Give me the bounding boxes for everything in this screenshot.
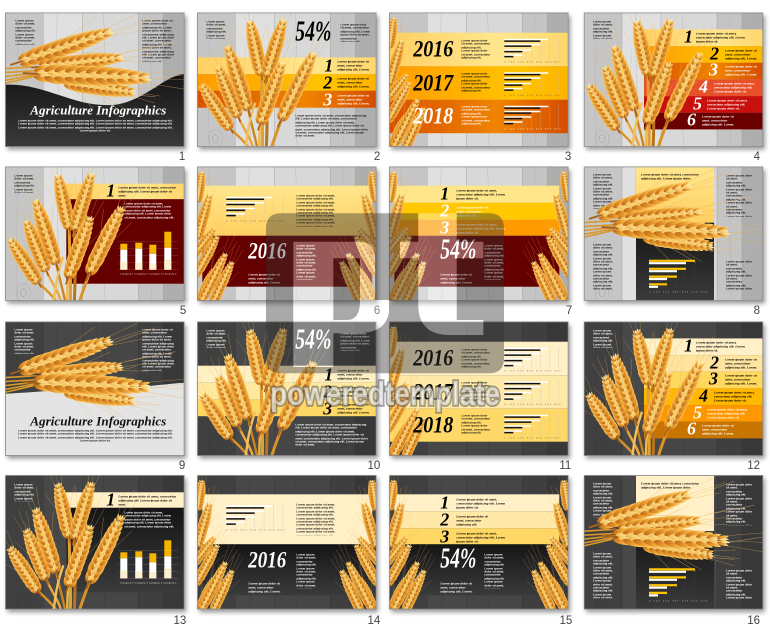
numbered list	[439, 492, 510, 546]
slide 6: yellow chart panel and maroon 2016 panel	[196, 166, 382, 314]
black panel	[636, 531, 714, 609]
icon: wheat left	[373, 467, 442, 625]
page number: 13	[174, 615, 186, 627]
numbered list: 1	[324, 56, 333, 76]
text: columns	[593, 482, 754, 600]
step bands	[644, 338, 764, 438]
slide 4: six step list	[583, 12, 768, 160]
slide 7: three bands and 54 percent on maroon	[373, 159, 584, 317]
year 2017 row	[412, 380, 561, 406]
black panel	[202, 544, 372, 595]
slide 5: column chart on maroon	[4, 166, 190, 314]
year 2016 row: 0 100 200 300 400 500 600	[504, 62, 561, 64]
year: 2016	[247, 239, 287, 264]
bands	[394, 186, 559, 287]
page number: 10	[368, 460, 380, 472]
column chart	[118, 232, 178, 276]
icon: wheat left	[181, 467, 250, 625]
title: Agriculture Infographics	[29, 103, 166, 118]
numbered steps: 3	[708, 60, 718, 80]
year: 2016	[247, 547, 287, 572]
year 2017 row: 2017	[412, 380, 455, 405]
numbered steps: 5	[693, 94, 702, 114]
heading number and text: 1	[106, 181, 115, 201]
slide 12: dark wood six step list	[565, 303, 765, 472]
numbered list: 3	[439, 218, 449, 238]
page number: 7	[566, 305, 572, 317]
slide 15: pale bands and 54 percent on black	[373, 467, 584, 627]
slide 2: 54 percent with three bands	[196, 12, 382, 160]
slide 14: cream chart panel and black 2016 panel	[181, 467, 392, 627]
numbered steps: 4	[698, 77, 708, 97]
bands	[394, 494, 559, 595]
year 2017 row: 2017	[412, 71, 455, 96]
numbered steps	[684, 336, 759, 439]
page number: 14	[368, 615, 381, 627]
page number: 2	[374, 151, 380, 163]
numbered steps: 5	[693, 403, 702, 423]
year 2017 row: 0 100 200 300 400 500 600	[504, 404, 561, 406]
numbered list	[322, 365, 370, 419]
numbered list: 1	[324, 365, 333, 385]
page number: 6	[374, 305, 380, 317]
bands 1 to 3	[197, 57, 377, 108]
numbered list: 3	[322, 399, 332, 419]
year 2016 row	[412, 37, 561, 64]
icon: wheat right	[516, 159, 584, 316]
slide 11: dark wood years with bar charts	[373, 314, 571, 472]
page number: 16	[747, 615, 760, 627]
column chart: Category 1 Category 2 Category 3 Category 4	[120, 273, 177, 276]
numbered steps	[684, 27, 759, 130]
page number: 12	[747, 460, 760, 472]
bar chart	[226, 504, 285, 531]
yellow header band	[65, 184, 185, 199]
slide 10: dark wood, 54 percent and pale bands	[178, 303, 380, 472]
step bands	[644, 29, 764, 129]
maroon panel	[202, 236, 372, 287]
bar chart	[226, 196, 285, 223]
text: columns	[593, 174, 754, 292]
numbered list	[323, 60, 370, 106]
icon: wheat bouquet	[0, 456, 148, 611]
year 2018 row	[412, 104, 561, 131]
numbered steps: 6	[687, 110, 696, 130]
cream panel	[202, 494, 372, 544]
year 2018 row: 0 100 200 300 400 500 600	[504, 129, 561, 131]
icon: wheat left	[373, 159, 442, 316]
heading number and text: 1	[106, 489, 115, 509]
year 2016 row: 0 100 200 300 400 500 600	[504, 371, 561, 373]
bar chart: 0 100 200 300 400 500 600	[226, 221, 285, 223]
yellow panel	[202, 186, 372, 236]
icon: wheat bunch	[582, 157, 770, 266]
year 2016 row: 2016	[412, 37, 454, 62]
numbered list: 1	[440, 492, 449, 512]
page number: 11	[559, 460, 571, 472]
heading number and text	[106, 489, 176, 509]
percentage: 54%	[295, 17, 331, 48]
numbered list	[439, 184, 510, 238]
yellow panel	[636, 167, 714, 223]
numbered steps: 2	[709, 44, 719, 64]
numbered steps: 1	[684, 336, 693, 356]
bands	[389, 342, 569, 442]
icon: side wheat	[373, 314, 442, 471]
year 2018 row	[412, 413, 561, 440]
icon: wheat right	[324, 467, 392, 625]
maroon panel	[66, 199, 185, 284]
year 2017 row	[412, 71, 561, 97]
numbered list: 2	[439, 509, 449, 529]
year 2018 row: 2018	[412, 104, 454, 129]
column chart	[118, 540, 178, 584]
bands	[389, 33, 569, 133]
icon: wheat bunch	[582, 465, 770, 575]
title: Agriculture Infographics	[29, 414, 166, 429]
column chart: Category 1 Category 2 Category 3 Category 4	[120, 581, 177, 584]
page number: 8	[754, 305, 760, 317]
numbered steps: 6	[687, 419, 696, 439]
numbered list: 3	[439, 526, 449, 546]
slide 3: years with bar charts	[388, 12, 574, 160]
black panel	[66, 508, 185, 592]
icon: wheat bouquet	[6, 167, 139, 301]
bands	[197, 366, 377, 416]
dark panel	[636, 223, 714, 301]
chart	[649, 566, 708, 602]
percentage: 54%	[295, 325, 331, 356]
icon: wheat bouquet	[565, 303, 727, 458]
numbered list: 2	[322, 73, 332, 93]
year 2016 row	[412, 346, 561, 373]
percentage: 54%	[440, 543, 476, 574]
icon: wheat bunch	[5, 14, 184, 109]
cream panel	[636, 475, 714, 531]
percentage: 54%	[440, 235, 476, 266]
icon: wheat left	[181, 159, 250, 316]
year 2017 row: 0 100 200 300 400 500 600	[504, 95, 561, 97]
chart: 0 100 200 300 400 500 600	[649, 292, 708, 294]
numbered list: 3	[322, 90, 332, 110]
numbered steps: 2	[709, 353, 719, 373]
year 2016 row: 2016	[412, 346, 454, 371]
bar chart: 0 100 200 300 400 500 600	[226, 529, 285, 531]
watermark text: poweredtemplate	[270, 375, 500, 412]
slide 1: agriculture title, light wood with black wave	[4, 12, 190, 160]
watermark logo	[266, 213, 504, 373]
icon: wheat bouquet	[178, 303, 340, 458]
slide 16: dark wood wheat across central column	[582, 465, 770, 627]
year 2018 row: 0 100 200 300 400 500 600	[504, 438, 561, 440]
icon: wheat bouquet	[198, 13, 331, 147]
page number: 4	[754, 151, 761, 163]
icon: wheat bunch	[3, 312, 194, 421]
page number: 3	[565, 151, 571, 163]
page number: 1	[179, 151, 185, 163]
slide 8: wheat across central column	[582, 157, 770, 317]
icon: wheat right	[516, 467, 584, 625]
chart	[649, 258, 708, 294]
numbered steps: 4	[698, 386, 708, 406]
icon: wheat bouquet	[584, 13, 718, 147]
slide 13: dark wood column chart	[0, 456, 186, 627]
page number: 9	[179, 460, 185, 472]
page number: 15	[560, 615, 572, 627]
numbered list: 2	[439, 201, 449, 221]
icon: wheat right	[324, 159, 392, 316]
numbered steps: 1	[684, 27, 693, 47]
heading number and text	[106, 184, 176, 196]
numbered list: 1	[440, 184, 449, 204]
numbered list: 2	[322, 382, 332, 402]
numbered steps: 3	[708, 369, 718, 389]
year 2018 row: 2018	[412, 413, 454, 438]
slide 9: title on dark wood with light lower part	[3, 312, 194, 472]
page number: 5	[180, 305, 186, 317]
icon: side wheat	[389, 13, 436, 147]
cream header band	[65, 492, 185, 508]
chart: 0 100 200 300 400 500 600	[649, 600, 708, 602]
